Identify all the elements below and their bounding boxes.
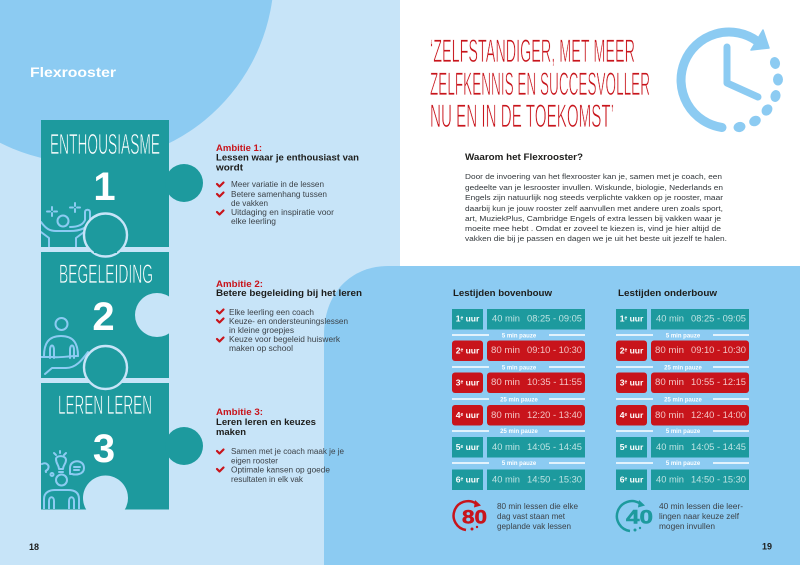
pause 25 min <box>616 366 749 372</box>
hour 3: uur <box>463 378 480 388</box>
hour 1: e <box>460 316 463 322</box>
hour 4: 12:20 - 13:40 <box>527 410 582 420</box>
why paragraph: gedeelte van je lesrooster invullen. Wiskunde, biologie, Nederlands en <box>465 183 723 192</box>
hour 1: uur <box>463 314 480 324</box>
ambition 3 list: Samen met je coach maak je je <box>231 447 345 456</box>
why paragraph: vakken die bij je passen en dagen we je uit het beste uit jezelf te halen. <box>465 234 727 243</box>
ambition 3 heading: maken <box>216 427 246 438</box>
why paragraph <box>465 172 727 243</box>
hour 6: uur <box>463 474 480 484</box>
ambition 3 list: eigen rooster <box>231 456 278 466</box>
hour 1: 40 min <box>492 314 520 324</box>
puzzle 2 number: 2 <box>92 295 115 339</box>
hour 2: 2 <box>456 346 460 356</box>
icon: 40 minutes <box>617 500 653 532</box>
pause 5 min: 5 min pauze <box>502 334 537 340</box>
ambition 1 list <box>231 180 334 226</box>
hour 1: 08:25 - 09:05 <box>527 314 582 324</box>
ambition 1 heading: Lessen waar je enthousiast van <box>216 152 359 164</box>
hour 6: 6 <box>620 474 624 484</box>
pause 25 min <box>616 398 749 404</box>
ambition 1 list: elke leerling <box>231 217 276 226</box>
ambition 1 list: de vakken <box>231 199 268 208</box>
puzzle 1 number: 1 <box>93 165 116 209</box>
hour 2: uur <box>627 346 644 356</box>
puzzle piece 2 <box>41 214 179 378</box>
why paragraph: Engels zijn natuurlijk nog steeds verplichte vakken op je rooster, maar <box>465 193 724 202</box>
note 80 minutes: geplande vak lessen <box>497 522 571 531</box>
pause 5 min <box>452 366 585 372</box>
pause 25 min <box>452 398 585 404</box>
hour 1: 40 min <box>656 314 684 324</box>
ambition 3 list <box>231 447 345 484</box>
hour 3: uur <box>627 378 644 388</box>
hour 4: uur <box>463 410 480 420</box>
ambition 1 <box>215 143 359 226</box>
page number 18: 18 <box>29 542 39 552</box>
hour 6 <box>452 470 585 490</box>
hour 1 <box>616 309 749 330</box>
note 80 minutes: dag vast staan met <box>497 512 566 521</box>
hour 3 <box>616 372 749 393</box>
hour 6: e <box>460 476 463 482</box>
puzzle piece 1 <box>41 120 203 247</box>
hour 2: 2 <box>620 346 624 356</box>
pause 5 min: 5 min pauze <box>502 366 537 372</box>
hour 5: 40 min <box>656 442 684 452</box>
pause 25 min: 25 min pauze <box>500 429 538 435</box>
puzzle 2 title: BEGELEIDING <box>59 259 153 289</box>
note 80 minutes <box>497 502 579 531</box>
icon: 40 minutes: 40 <box>626 508 653 528</box>
hour 3: e <box>624 380 627 386</box>
hour 4: 80 min <box>655 410 684 420</box>
why paragraph: moeite mee hebt . Omdat er zoveel te kiezen is, vind je hier altijd de <box>465 224 721 233</box>
hour 6: uur <box>627 474 644 484</box>
hour 3 <box>452 372 585 393</box>
hour 3: 10:55 - 12:15 <box>691 377 746 387</box>
ambition 3 list: Optimale kansen op goede <box>231 466 331 474</box>
page number 19: 19 <box>762 542 772 552</box>
hour 2 <box>616 340 749 361</box>
schedule heading bovenbouw: Lestijden bovenbouw <box>453 288 553 299</box>
hour 3: 80 min <box>491 377 520 387</box>
pause 5 min: 5 min pauze <box>666 334 701 340</box>
icon: 80 minutes <box>454 500 487 530</box>
hour 1: uur <box>627 314 644 324</box>
ambition 1 heading <box>215 143 359 174</box>
pause 25 min: 25 min pauze <box>664 398 702 404</box>
puzzle 3 title: LEREN LEREN <box>58 390 152 420</box>
hour 4: e <box>460 412 463 418</box>
hour 5: 40 min <box>492 442 520 452</box>
puzzle piece 3 <box>41 346 203 520</box>
why heading: Waarom het Flexrooster? <box>465 152 583 163</box>
ambition 3 heading: Leren leren en keuzes <box>216 417 316 428</box>
hour 2: e <box>460 348 463 354</box>
puzzle 3 number: 3 <box>93 427 115 471</box>
hour 2: 09:10 - 10:30 <box>527 345 582 355</box>
hour 5: e <box>624 444 627 450</box>
hour 5 <box>452 437 585 458</box>
hour 1: e <box>624 316 627 322</box>
ambition 2 checks <box>217 310 224 342</box>
note 40 minutes: mogen invullen <box>659 522 715 531</box>
pause 25 min: 25 min pauze <box>500 398 538 404</box>
hour 4: 80 min <box>491 410 520 420</box>
ambition 3 list: resultaten in elk vak <box>231 475 304 484</box>
blue circle top left <box>0 0 274 163</box>
ambition 1 list: Betere samenhang tussen <box>231 190 327 199</box>
hour 6: 40 min <box>492 474 520 484</box>
ambition 2 list <box>229 308 348 353</box>
hour 4: uur <box>627 410 644 420</box>
ambition 3 heading: Ambitie 3: <box>216 407 263 418</box>
hour 3: e <box>460 380 463 386</box>
hour 4 <box>452 405 585 426</box>
hour 6: 40 min <box>656 474 684 484</box>
hour 5 <box>616 437 749 458</box>
pause 5 min <box>616 461 749 467</box>
note 40 minutes <box>659 502 743 531</box>
pause 25 min <box>452 429 585 435</box>
hour 5: 14:05 - 14:45 <box>691 442 746 452</box>
hour 4: e <box>624 412 627 418</box>
icon: cheering person <box>41 203 90 247</box>
ambition 1 list: Uitdaging en inspiratie voor <box>231 208 334 217</box>
ambition 1 checks <box>217 182 224 214</box>
hour 6: 14:50 - 15:30 <box>527 474 582 484</box>
hour 3: 3 <box>456 378 460 388</box>
ambition 1 list: Meer variatie in de lessen <box>231 180 324 189</box>
hour 2 <box>452 340 585 361</box>
pause 5 min <box>616 334 749 340</box>
schedule: onderbouw <box>616 288 749 532</box>
ambition 2 list: Keuze voor begeleid huiswerk <box>229 335 341 344</box>
schedule heading onderbouw: Lestijden onderbouw <box>618 288 718 299</box>
hour 4 <box>616 405 749 426</box>
pause 5 min <box>452 334 585 340</box>
hour 3: 80 min <box>655 377 684 387</box>
hour 6: 6 <box>456 474 460 484</box>
note 80 minutes: 80 min lessen die elke <box>497 502 579 511</box>
pause 5 min: 5 min pauze <box>666 461 701 467</box>
ambition 3 checks <box>217 450 224 472</box>
hour 5: e <box>460 444 463 450</box>
quote headline <box>430 33 650 134</box>
icon: supported person <box>41 318 88 374</box>
hour 5: 5 <box>456 442 460 452</box>
hour 1: 08:25 - 09:05 <box>691 314 746 324</box>
schedule: bovenbouw <box>452 288 585 531</box>
note 40 minutes: 40 min lessen die leer- <box>659 502 743 511</box>
why paragraph: Door de invoering van het flexrooster kan je, samen met je coach, een <box>465 172 722 181</box>
hour 1: 1 <box>620 314 624 324</box>
hour 6 <box>616 470 749 490</box>
ambition 2 list: maken op school <box>229 344 293 353</box>
ambition 2 <box>216 279 362 353</box>
ambition 2 list: Elke leerling een coach <box>229 308 314 317</box>
hour 5: 14:05 - 14:45 <box>527 442 582 452</box>
why paragraph: art, MuziekPlus, Cambridge Engels of extra lessen bij vakken waar je <box>465 214 721 223</box>
ambition 2 heading <box>216 279 362 299</box>
page title: Flexrooster <box>30 64 117 80</box>
ambition 2 heading: Ambitie 2: <box>216 279 263 290</box>
ambition 3 <box>216 407 345 484</box>
ambition 3 heading <box>216 407 316 438</box>
pause 5 min: 5 min pauze <box>666 429 701 435</box>
icon: clock with arrow <box>681 30 783 133</box>
hour 1: 1 <box>456 314 460 324</box>
hour 2: 80 min <box>655 345 684 355</box>
hour 6: 14:50 - 15:30 <box>691 474 746 484</box>
hour 6: e <box>624 476 627 482</box>
pause 5 min <box>616 429 749 435</box>
hour 3: 10:35 - 11:55 <box>527 377 582 387</box>
puzzle piece 1: ENTHOUSIASME <box>50 129 160 161</box>
pause 25 min: 25 min pauze <box>664 366 702 372</box>
hour 5: uur <box>463 442 480 452</box>
hour 4: 12:40 - 14:00 <box>691 410 746 420</box>
ambition 2 list: in kleine groepjes <box>229 326 294 335</box>
ambition 1 heading: wordt <box>215 162 244 174</box>
why paragraph: daarbij kun je jouw rooster zelf aanvullen met andere uren zoals sport, <box>465 204 723 213</box>
icon: thinking person <box>42 451 84 509</box>
note 40 minutes: lingen naar keuze zelf <box>659 512 740 521</box>
hour 3: 3 <box>620 378 624 388</box>
blue panel bottom right <box>324 266 800 565</box>
icon: 80 minutes: 80 <box>462 508 487 528</box>
ambition 2 list: Keuze- en ondersteuningslessen <box>229 317 348 326</box>
white panel top right <box>400 0 800 266</box>
hour 4: 4 <box>456 410 460 420</box>
hour 2: e <box>624 348 627 354</box>
hour 2: uur <box>463 346 480 356</box>
pause 5 min <box>452 461 585 467</box>
ambition 2 heading: Betere begeleiding bij het leren <box>216 288 362 299</box>
hour 5: 5 <box>620 442 624 452</box>
hour 2: 09:10 - 10:30 <box>691 345 746 355</box>
pause 5 min: 5 min pauze <box>502 461 537 467</box>
ambition 1 heading: Ambitie 1: <box>216 143 262 154</box>
hour 1 <box>452 309 585 330</box>
hour 5: uur <box>627 442 644 452</box>
hour 4: 4 <box>620 410 624 420</box>
hour 2: 80 min <box>491 345 520 355</box>
